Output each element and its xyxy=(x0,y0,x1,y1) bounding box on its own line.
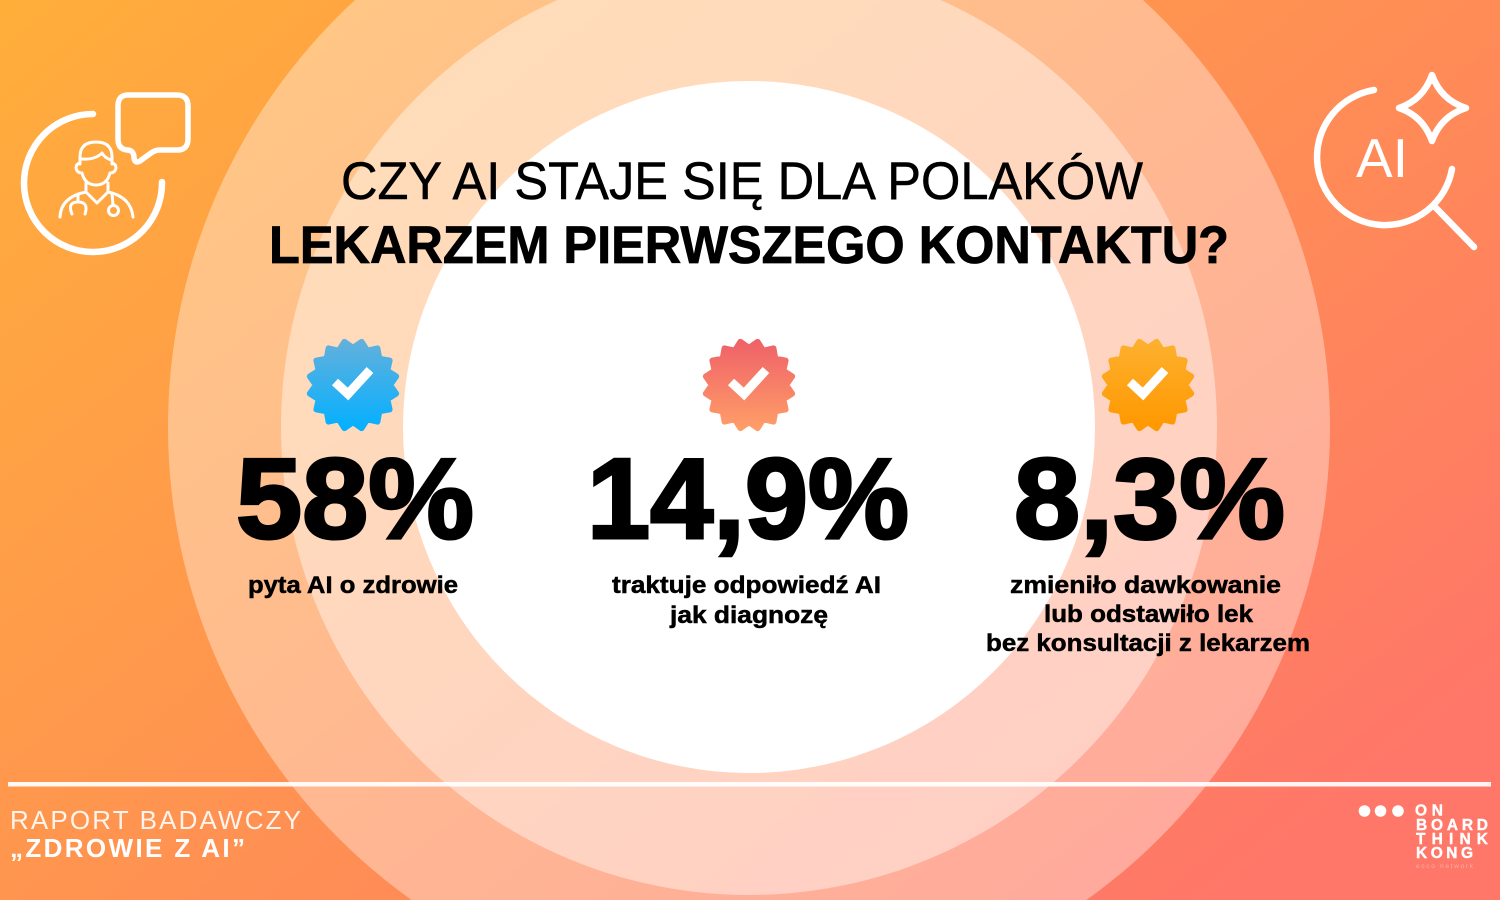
footer divider xyxy=(8,782,1491,786)
logo wordmark: ON xyxy=(1415,802,1443,820)
title line 2: LEKARZEM PIERWSZEGO KONTAKTU? xyxy=(269,216,1229,275)
caption: lub odstawiło lek xyxy=(1044,601,1254,628)
outer ring xyxy=(168,0,1330,900)
magnifier handle xyxy=(1436,208,1474,247)
logo wordmark: BOARD xyxy=(1416,817,1488,834)
doctor icon ring xyxy=(24,114,162,252)
caption: bez konsultacji z lekarzem xyxy=(986,630,1310,657)
caption xyxy=(612,572,881,629)
inner white circle xyxy=(403,81,1095,773)
stat: 58% xyxy=(236,342,474,599)
AI letters: AI xyxy=(1356,127,1408,189)
caption: zmieniło dawkowanie xyxy=(1010,572,1281,599)
report label line 1: RAPORT BADAWCZY xyxy=(10,805,301,835)
badge: blue check xyxy=(310,342,396,428)
logo dots xyxy=(1359,805,1404,817)
magnifier lens arc xyxy=(1317,90,1452,225)
icon: AI magnifier with sparkle xyxy=(1317,75,1474,247)
title xyxy=(269,152,1229,275)
sparkle star xyxy=(1399,75,1466,141)
doctor figure xyxy=(60,142,133,217)
logo wordmark: THINK xyxy=(1416,831,1489,848)
badge: red check xyxy=(706,342,792,428)
icon: doctor with speech bubble xyxy=(24,95,188,252)
middle ring xyxy=(281,0,1217,895)
logo tagline: ecco network xyxy=(1416,863,1474,870)
value 14,9%: 14,9% xyxy=(587,436,909,563)
logo: On Board Think Kong xyxy=(1359,802,1489,870)
caption: traktuje odpowiedź AI xyxy=(612,572,881,599)
stat: 14,9% xyxy=(587,342,909,629)
value 58%: 58% xyxy=(236,436,474,563)
caption: pyta AI o zdrowie xyxy=(248,572,458,599)
value 8,3%: 8,3% xyxy=(1014,436,1285,563)
caption xyxy=(986,572,1310,657)
title line 1: CZY AI STAJE SIĘ DLA POLAKÓW xyxy=(341,152,1143,211)
speech bubble xyxy=(118,95,188,162)
report label line 2: „ZDROWIE Z AI” xyxy=(10,833,245,863)
stat: 8,3% xyxy=(986,342,1310,657)
logo wordmark: KONG xyxy=(1416,845,1473,862)
badge: amber check xyxy=(1105,342,1191,428)
caption: jak diagnozę xyxy=(669,602,828,629)
footer report label xyxy=(10,805,301,863)
logo wordmark xyxy=(1415,802,1489,862)
